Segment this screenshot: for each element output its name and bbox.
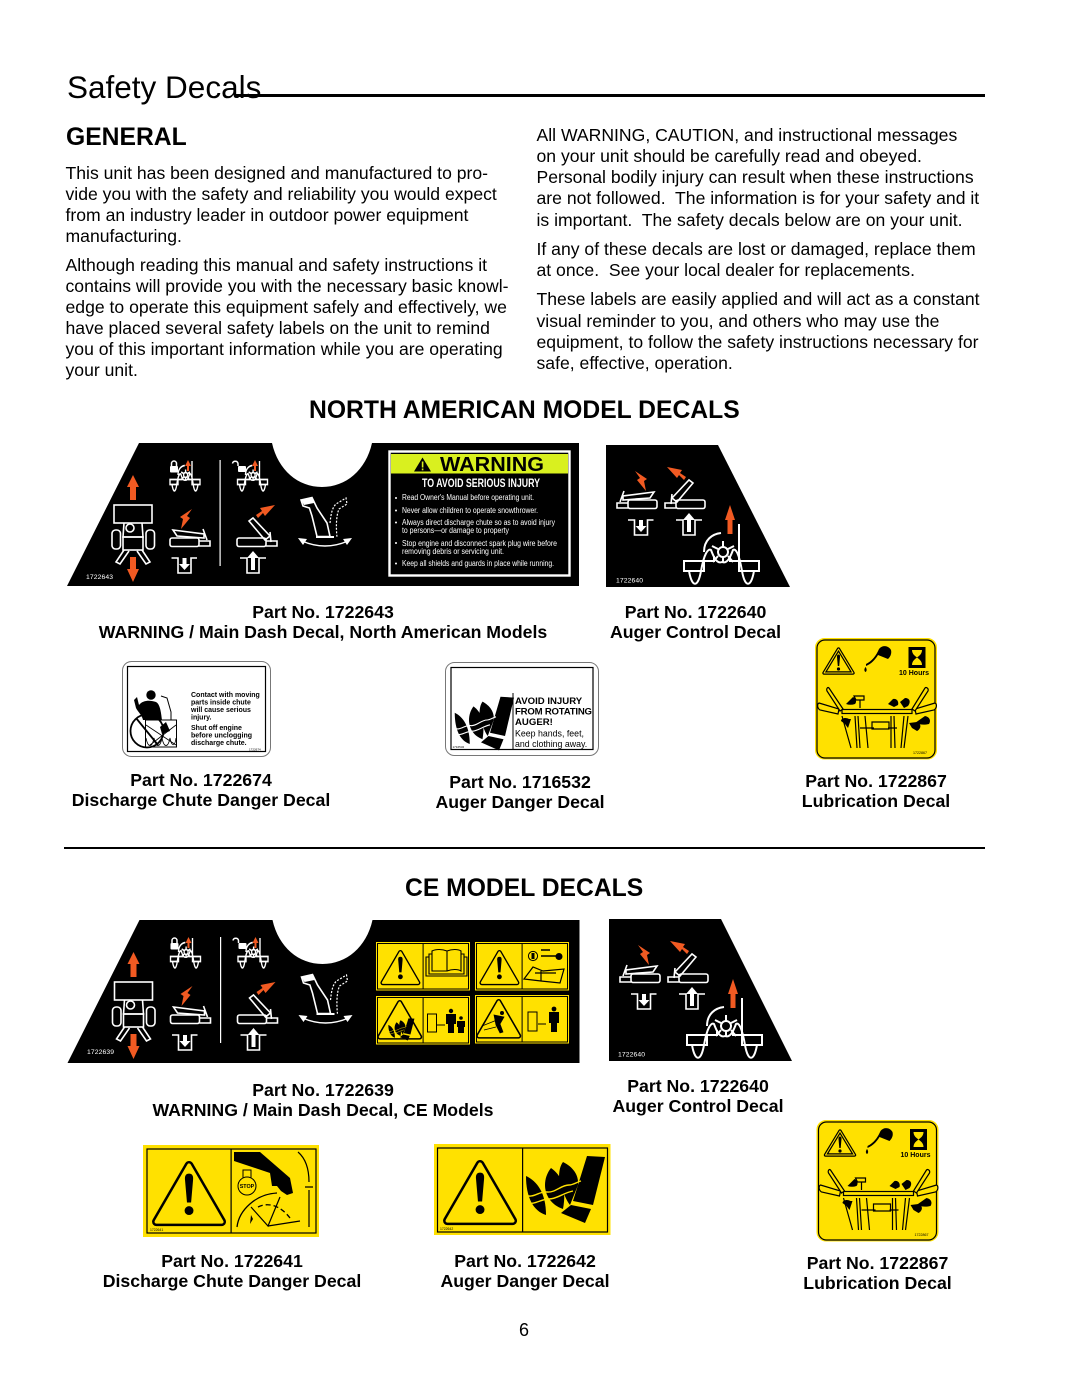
panel: discharge chute danger decal North American: Shut off engine — [191, 725, 242, 732]
warning label: Keep all shields and guards in place while running. — [402, 559, 554, 568]
caption: part 1716532 — [435, 772, 605, 812]
panel: lubrication decal CE: 1722867 — [914, 1233, 928, 1237]
warning label: removing debris or servicing unit. — [402, 547, 504, 556]
section divider — [64, 847, 985, 849]
caption: part 1722641 — [103, 1251, 361, 1291]
panel: auger control decal CE: 1722640 — [618, 1052, 645, 1058]
caption: part 1722867: Part No. 1722867 — [805, 771, 947, 791]
warning label: Never allow children to operate snowthrower. — [402, 506, 538, 515]
panel: discharge chute danger decal CE: 1722641 — [150, 1228, 163, 1232]
caption: part 1716532: Part No. 1716532 — [449, 772, 591, 792]
panel: lubrication decal CE: 10 Hours — [901, 1152, 931, 1159]
panel: lubrication decal North American: 10 Hours — [899, 670, 929, 677]
text block: general intro left column: This unit has been designed and manufactured to pro- — [66, 163, 488, 183]
panel: lubrication decal North American — [816, 638, 936, 759]
text block: general intro left column: from an industry leader in outdoor power equipment — [66, 205, 468, 225]
text block: general instructions right column: If any of these decals are lost or damaged, replace them — [536, 239, 976, 259]
caption: part 1722642: Auger Danger Decal — [440, 1271, 610, 1291]
panel: discharge chute danger decal CE — [143, 1145, 319, 1237]
caption: part 1722640 CE — [612, 1076, 784, 1116]
panel: auger danger decal CE — [434, 1144, 610, 1235]
caption: part 1722867 CE: Part No. 1722867 — [807, 1253, 948, 1273]
panel: discharge chute danger decal North American: parts inside chute — [191, 700, 251, 706]
panel: discharge chute danger decal North American: before unclogging — [191, 732, 252, 740]
text block: general intro left column: you of this important information while you are operating — [66, 339, 503, 359]
panel: discharge chute danger decal North American: discharge chute. — [191, 740, 247, 747]
panel: auger danger decal North American: Keep hands, feet, — [515, 728, 584, 738]
text block: general instructions right column: is important. The safety decals below are on your unit. — [536, 210, 963, 230]
warning label: to persons—or damage to property — [402, 526, 509, 535]
warning pictograms: read manual — [376, 942, 470, 990]
text block: general instructions right column: Personal bodily injury can result when these instructions — [536, 167, 974, 187]
title rule — [235, 94, 985, 96]
caption: part 1722674 — [72, 770, 330, 810]
panel: auger danger decal North American: AUGER! — [515, 717, 553, 728]
text block: general instructions right column: safe, effective, operation. — [536, 353, 733, 373]
caption: part 1722674: Discharge Chute Danger Decal — [72, 790, 330, 810]
warning label: Always direct discharge chute so as to avoid injury — [402, 518, 555, 527]
icon: person at auger with prohibition circle — [130, 690, 176, 748]
caption: part 1722639: Part No. 1722639 — [252, 1080, 394, 1100]
text block: general intro left column — [66, 163, 508, 380]
caption: part 1722639 — [152, 1080, 494, 1120]
text block: general intro left column: your unit. — [66, 360, 138, 380]
caption: part 1722643: Part No. 1722643 — [252, 602, 394, 622]
panel: auger danger decal North American: FROM ROTATING — [515, 706, 592, 718]
panel: lubrication decal North American: 1722867 — [913, 751, 927, 755]
warning label: Stop engine and disconnect spark plug wire before — [402, 539, 557, 548]
warning pictograms: auger, keep children away — [376, 996, 470, 1044]
panel: main dash decal North American — [67, 443, 579, 586]
panel: lubrication decal CE — [817, 1120, 938, 1241]
caption: part 1722867 CE — [803, 1253, 952, 1293]
warning label — [390, 452, 570, 576]
text block: general instructions right column: All WARNING, CAUTION, and instructional messages — [536, 125, 957, 145]
text block: general intro left column: manufacturing. — [66, 226, 182, 246]
warning pictograms: thrown objects, keep bystanders away — [475, 995, 569, 1044]
text block: general intro left column: contains will provide you with the necessary basic knowl- — [66, 276, 508, 296]
warning label: Read Owner's Manual before operating unit. — [402, 493, 534, 502]
text block: general instructions right column: These labels are easily applied and will act as a constant — [536, 289, 980, 309]
caption: part 1722642: Part No. 1722642 — [454, 1251, 596, 1271]
warning label: TO AVOID SERIOUS INJURY — [422, 478, 540, 490]
icon: hand and stop key — [234, 1152, 313, 1227]
text block: general instructions right column — [536, 125, 980, 373]
caption: part 1722640: Part No. 1722640 — [625, 602, 766, 622]
heading: North American model decals: NORTH AMERICAN MODEL DECALS — [309, 397, 740, 424]
text block: general instructions right column: on your unit should be carefully read and obeyed. — [536, 146, 922, 166]
warning label: WARNING — [440, 454, 544, 476]
caption: part 1722867 CE: Lubrication Decal — [803, 1273, 952, 1293]
panel: discharge chute danger decal North American: 1722674 — [249, 748, 261, 752]
caption: part 1722640 — [610, 602, 781, 642]
part number on decal: 1722643 — [86, 574, 113, 581]
panel: discharge chute danger decal North American: will cause serious — [190, 707, 251, 714]
icon: hand and stop key: STOP — [240, 1184, 255, 1190]
caption: part 1722641: Discharge Chute Danger Decal — [103, 1271, 361, 1291]
text block: general intro left column: have placed several safety labels on the unit to remind — [66, 318, 490, 338]
panel: main dash decal CE — [68, 920, 580, 1063]
caption: part 1722643 — [98, 602, 547, 642]
panel: auger control decal CE — [609, 919, 792, 1061]
caption: part 1722640 CE: Part No. 1722640 — [627, 1076, 769, 1096]
panel: discharge chute danger decal North American: injury. — [191, 714, 212, 722]
panel: auger control decal North American — [606, 445, 790, 587]
text block: general intro left column: vide you with the safety and reliability you would expect — [66, 184, 497, 204]
caption: part 1722674: Part No. 1722674 — [130, 770, 272, 790]
heading: CE model decals: CE MODEL DECALS — [405, 875, 643, 902]
page number: 6 — [519, 1320, 529, 1340]
panel: auger danger decal North American — [446, 662, 598, 756]
panel: auger danger decal North American: and clothing away. — [515, 739, 587, 749]
caption: part 1722641: Part No. 1722641 — [161, 1251, 303, 1271]
caption: part 1722640: Auger Control Decal — [610, 622, 781, 642]
icons: main dash controls — [112, 460, 352, 582]
caption: part 1722642 — [440, 1251, 610, 1291]
panel: auger danger decal North American: 1716532 — [452, 745, 465, 749]
caption: part 1722643: WARNING / Main Dash Decal, North American Models — [99, 622, 547, 642]
panel: auger danger decal North American: AVOID INJURY — [515, 696, 583, 707]
caption: part 1722867 — [802, 771, 950, 811]
caption: part 1722639: WARNING / Main Dash Decal, CE Models — [152, 1100, 494, 1120]
text block: general intro left column: Although reading this manual and safety instructions it — [66, 255, 487, 275]
text block: general instructions right column: visual reminder to you, and others who may use the — [536, 311, 939, 331]
text block: general intro left column: edge to operate this equipment safely and effectively, we — [66, 297, 507, 317]
warning pictograms: remove key, read manual — [475, 942, 569, 990]
panel: discharge chute danger decal North American — [122, 662, 270, 756]
panel: auger control decal North American: 1722640 — [616, 578, 643, 584]
text block: general instructions right column: equipment, to follow the safety instructions necessary for — [536, 332, 979, 352]
caption: part 1722640 CE: Auger Control Decal — [612, 1096, 784, 1116]
part number on decal: 1722639 — [87, 1049, 114, 1056]
caption: part 1716532: Auger Danger Decal — [435, 792, 605, 812]
text block: general instructions right column: at once. See your local dealer for replacements. — [536, 260, 915, 280]
panel: discharge chute danger decal North American: Contact with moving — [191, 692, 260, 699]
title: Safety Decals: Safety Decals — [67, 69, 261, 105]
text block: general instructions right column: are not followed. The information is for your safety and it — [536, 188, 979, 208]
panel: auger danger decal CE: 1722642 — [440, 1227, 453, 1231]
caption: part 1722867: Lubrication Decal — [802, 791, 950, 811]
icons: main dash controls — [112, 937, 352, 1059]
heading: General: GENERAL — [66, 124, 187, 151]
